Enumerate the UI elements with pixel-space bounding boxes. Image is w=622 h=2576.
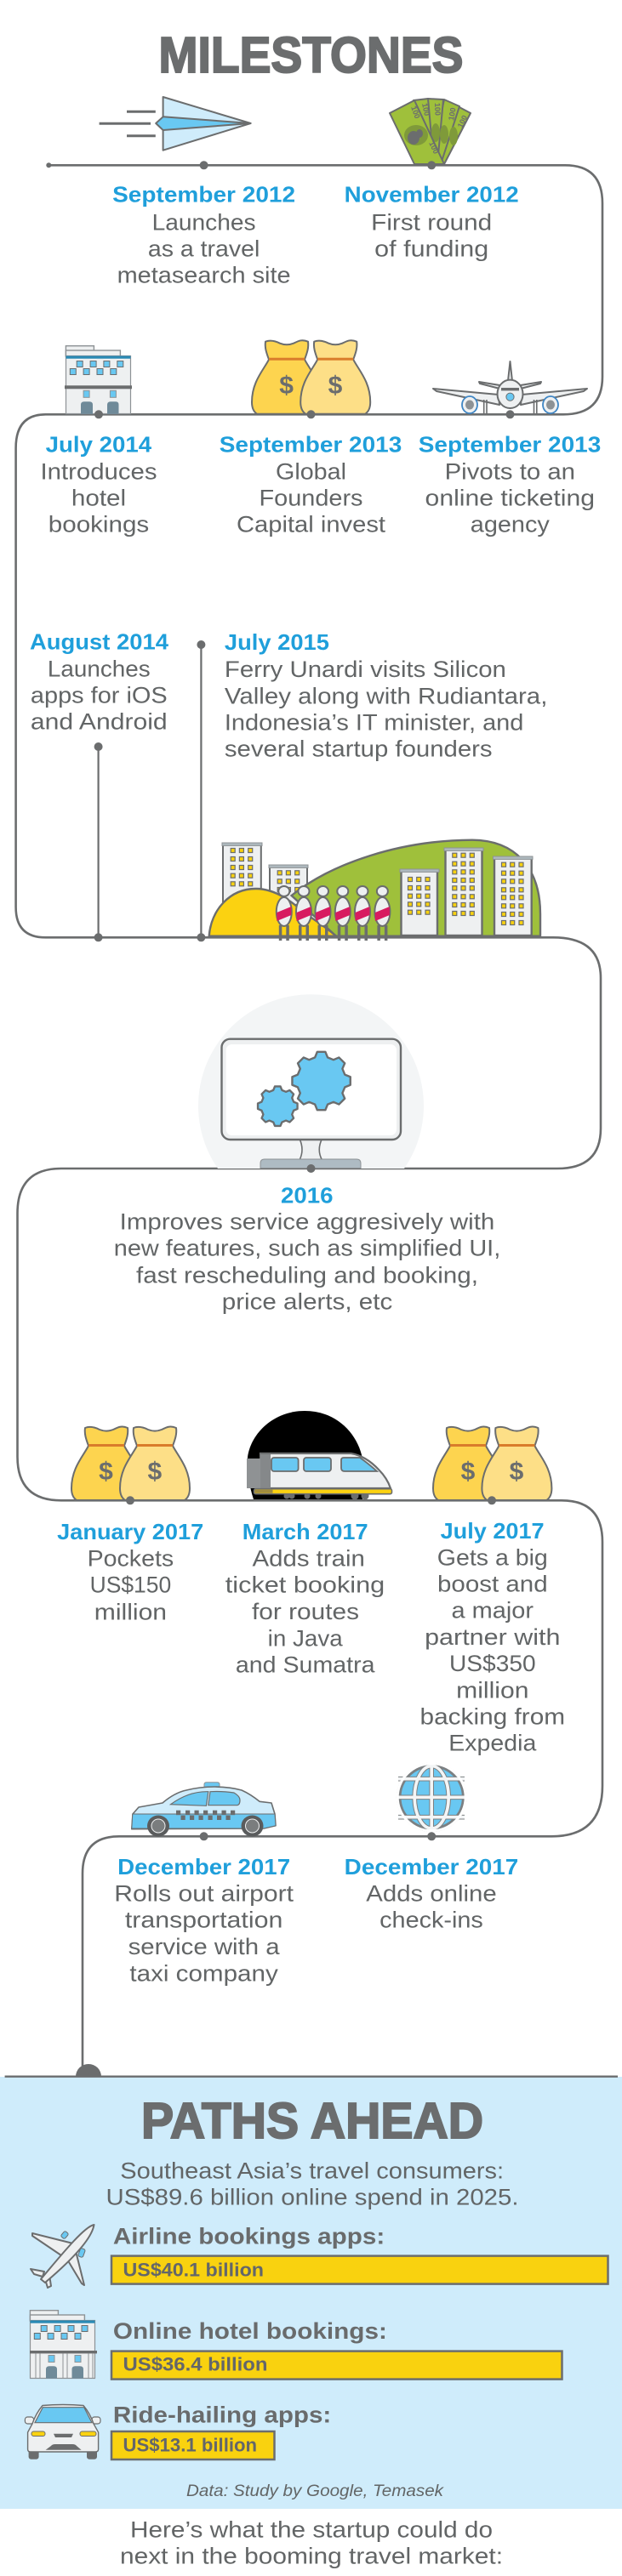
milestone: September 2013 funding xyxy=(220,340,402,537)
intro text xyxy=(106,2158,519,2210)
icon: hotel xyxy=(65,346,132,414)
timeline dot xyxy=(200,161,208,169)
description xyxy=(237,459,386,537)
description: Adds online xyxy=(366,1881,497,1907)
icon: money bags: $ xyxy=(279,372,294,400)
value: US$13.1 billion xyxy=(123,2435,257,2456)
date: August 2014 xyxy=(30,628,169,654)
description: Adds train xyxy=(252,1545,365,1571)
description: Rolls out airport xyxy=(114,1881,294,1907)
date: September 2012 xyxy=(112,182,295,208)
icon: airplane top view xyxy=(31,2225,94,2288)
intro text: Southeast Asia’s travel consumers: xyxy=(120,2158,504,2184)
description: Founders xyxy=(259,486,362,511)
milestone: December 2017 taxi xyxy=(114,1783,294,1986)
title: Milestones: MILESTONES xyxy=(158,27,463,83)
icon: fan of banknotes xyxy=(390,99,471,164)
icon: taxi xyxy=(132,1783,276,1837)
timeline dot xyxy=(505,410,514,418)
icon: money bags: $ xyxy=(99,1458,113,1486)
panel: paths ahead xyxy=(0,2064,622,2509)
milestone: December 2017 check-ins xyxy=(345,1764,518,1933)
start dot xyxy=(46,162,51,168)
description: First round xyxy=(371,210,492,236)
milestone: September 2013 pivot xyxy=(419,361,601,537)
date: September 2013 xyxy=(220,432,402,458)
date: December 2017 xyxy=(345,1854,518,1879)
description: online ticketing xyxy=(425,486,595,511)
label: Airline bookings apps: xyxy=(113,2223,385,2249)
bar: 40.1 billion xyxy=(111,2256,608,2284)
description: Expedia xyxy=(448,1730,537,1755)
description: Gets a big xyxy=(437,1544,548,1570)
description xyxy=(114,1881,294,1986)
date: January 2017 xyxy=(57,1519,203,1544)
milestone: August 2014 xyxy=(30,628,169,941)
icon: fan of banknotes: 100 xyxy=(427,140,441,155)
description: boost and xyxy=(437,1571,548,1596)
icon: train leaving tunnel xyxy=(247,1411,391,1500)
description: US$350 xyxy=(449,1651,536,1676)
icon: airliner front view xyxy=(433,361,587,413)
description: Global xyxy=(276,459,346,485)
description: million xyxy=(94,1599,167,1624)
description: bookings xyxy=(49,512,149,537)
timeline dot xyxy=(427,1832,436,1840)
description xyxy=(117,210,291,288)
timeline dot xyxy=(427,161,436,169)
connector stem xyxy=(197,640,205,941)
closing text: Here’s what the startup could do xyxy=(130,2516,493,2542)
description: hotel xyxy=(71,486,126,511)
description xyxy=(425,459,595,537)
description: Introduces xyxy=(41,459,157,485)
date: 2016 xyxy=(281,1182,334,1208)
icon: money bags: $ xyxy=(328,372,343,400)
description: partner with xyxy=(425,1624,560,1650)
closing text xyxy=(120,2516,503,2568)
heading: Paths Ahead: PATHS AHEAD xyxy=(141,2093,483,2149)
row: ride-hailing xyxy=(25,2402,331,2459)
icon: money bags: $ xyxy=(461,1458,476,1486)
timeline dot xyxy=(306,410,315,418)
description: Valley along with Rudiantara, xyxy=(225,683,547,708)
icon: car front view xyxy=(25,2405,100,2459)
icon: money bags xyxy=(252,340,370,414)
date: November 2012 xyxy=(345,182,519,208)
description: several startup founders xyxy=(225,736,493,761)
icon: fan of banknotes: 100 xyxy=(409,105,422,120)
description: price alerts, etc xyxy=(222,1288,392,1314)
description: for routes xyxy=(252,1599,359,1624)
label: Online hotel bookings: xyxy=(113,2318,387,2344)
milestone: July 2017 xyxy=(420,1427,565,1755)
icon: money bags xyxy=(433,1427,551,1500)
description: apps for iOS xyxy=(31,682,168,708)
description: and Android xyxy=(31,708,168,734)
description xyxy=(114,1209,500,1314)
description: Indonesia’s IT minister, and xyxy=(225,709,523,735)
icon: money bags: $ xyxy=(510,1458,524,1486)
description: Capital invest xyxy=(237,512,386,537)
icon: fan of banknotes: 100 xyxy=(433,103,442,116)
description xyxy=(41,459,157,537)
description xyxy=(366,1881,497,1933)
description: check-ins xyxy=(379,1908,483,1933)
value: US$40.1 billion xyxy=(123,2260,264,2281)
description: Ferry Unardi visits Silicon xyxy=(225,657,506,682)
icon: money bags xyxy=(71,1427,190,1500)
description: Launches xyxy=(48,656,151,681)
connector stem xyxy=(94,742,103,941)
timeline dot xyxy=(306,1164,315,1173)
description: Launches xyxy=(152,210,256,236)
description: transportation xyxy=(125,1908,282,1933)
date: July 2014 xyxy=(46,432,152,458)
icon: fan of banknotes: 100 xyxy=(447,107,458,121)
description xyxy=(371,210,492,262)
description: metasearch site xyxy=(117,263,291,288)
description: and Sumatra xyxy=(236,1652,375,1677)
milestone: July 2014 xyxy=(41,346,157,537)
date: July 2017 xyxy=(441,1518,545,1544)
description: a major xyxy=(452,1597,534,1623)
description: agency xyxy=(471,512,551,537)
description: in Java xyxy=(268,1625,343,1651)
timeline dot xyxy=(200,1832,208,1840)
date: March 2017 xyxy=(243,1519,368,1544)
milestone: January 2017 xyxy=(57,1427,203,1624)
data source: Data: Study by Google, Temasek xyxy=(186,2482,445,2500)
description: million xyxy=(456,1678,528,1703)
description: US$150 xyxy=(90,1572,171,1597)
label: Ride-hailing apps: xyxy=(113,2402,331,2427)
timeline end cap xyxy=(76,2064,101,2077)
description: ticket booking xyxy=(225,1572,385,1597)
milestone: November 2012 xyxy=(345,99,519,262)
closing text: next in the booming travel market: xyxy=(120,2543,503,2568)
date: December 2017 xyxy=(117,1854,290,1879)
description: as a travel xyxy=(148,236,260,262)
illustration: city with founders xyxy=(208,840,541,941)
description xyxy=(88,1545,174,1624)
bar: 13.1 billion xyxy=(111,2431,274,2459)
milestone: 2016 xyxy=(114,994,500,1314)
description: of funding xyxy=(374,236,488,262)
value: US$36.4 billion xyxy=(123,2354,267,2375)
description: Improves service aggresively with xyxy=(120,1209,494,1235)
icon: fan of banknotes: 100 xyxy=(420,102,431,117)
description xyxy=(31,656,168,734)
description: taxi company xyxy=(129,1960,279,1986)
timeline path xyxy=(16,165,602,2067)
icon: paper plane xyxy=(100,97,251,151)
icon: globe xyxy=(397,1764,465,1831)
milestone: March 2017 xyxy=(225,1411,391,1677)
divider xyxy=(5,2075,618,2078)
timeline dot xyxy=(488,1496,496,1504)
intro text: US$89.6 billion online spend in 2025. xyxy=(106,2185,519,2210)
description xyxy=(225,1545,385,1677)
timeline dot xyxy=(126,1496,134,1504)
description xyxy=(225,657,547,761)
description: new features, such as simplified UI, xyxy=(114,1236,500,1261)
description xyxy=(420,1544,565,1755)
description: service with a xyxy=(128,1934,280,1959)
date: September 2013 xyxy=(419,432,601,458)
description: backing from xyxy=(420,1704,565,1730)
description: fast rescheduling and booking, xyxy=(136,1262,478,1288)
icon: fan of banknotes: 100 xyxy=(456,114,469,129)
milestone: September 2012 xyxy=(46,97,295,288)
milestone: July 2015 xyxy=(197,629,547,941)
icon: monitor with gears xyxy=(198,994,424,1169)
row: airline bookings xyxy=(31,2223,608,2288)
icon: money bags: $ xyxy=(147,1458,162,1486)
description: Pockets xyxy=(88,1545,174,1571)
row: online hotel bookings xyxy=(30,2311,562,2380)
timeline dot xyxy=(94,410,103,418)
icon: hotel xyxy=(30,2311,97,2379)
bar: 36.4 billion xyxy=(111,2351,562,2380)
description: Pivots to an xyxy=(445,459,575,485)
date: July 2015 xyxy=(225,629,329,655)
